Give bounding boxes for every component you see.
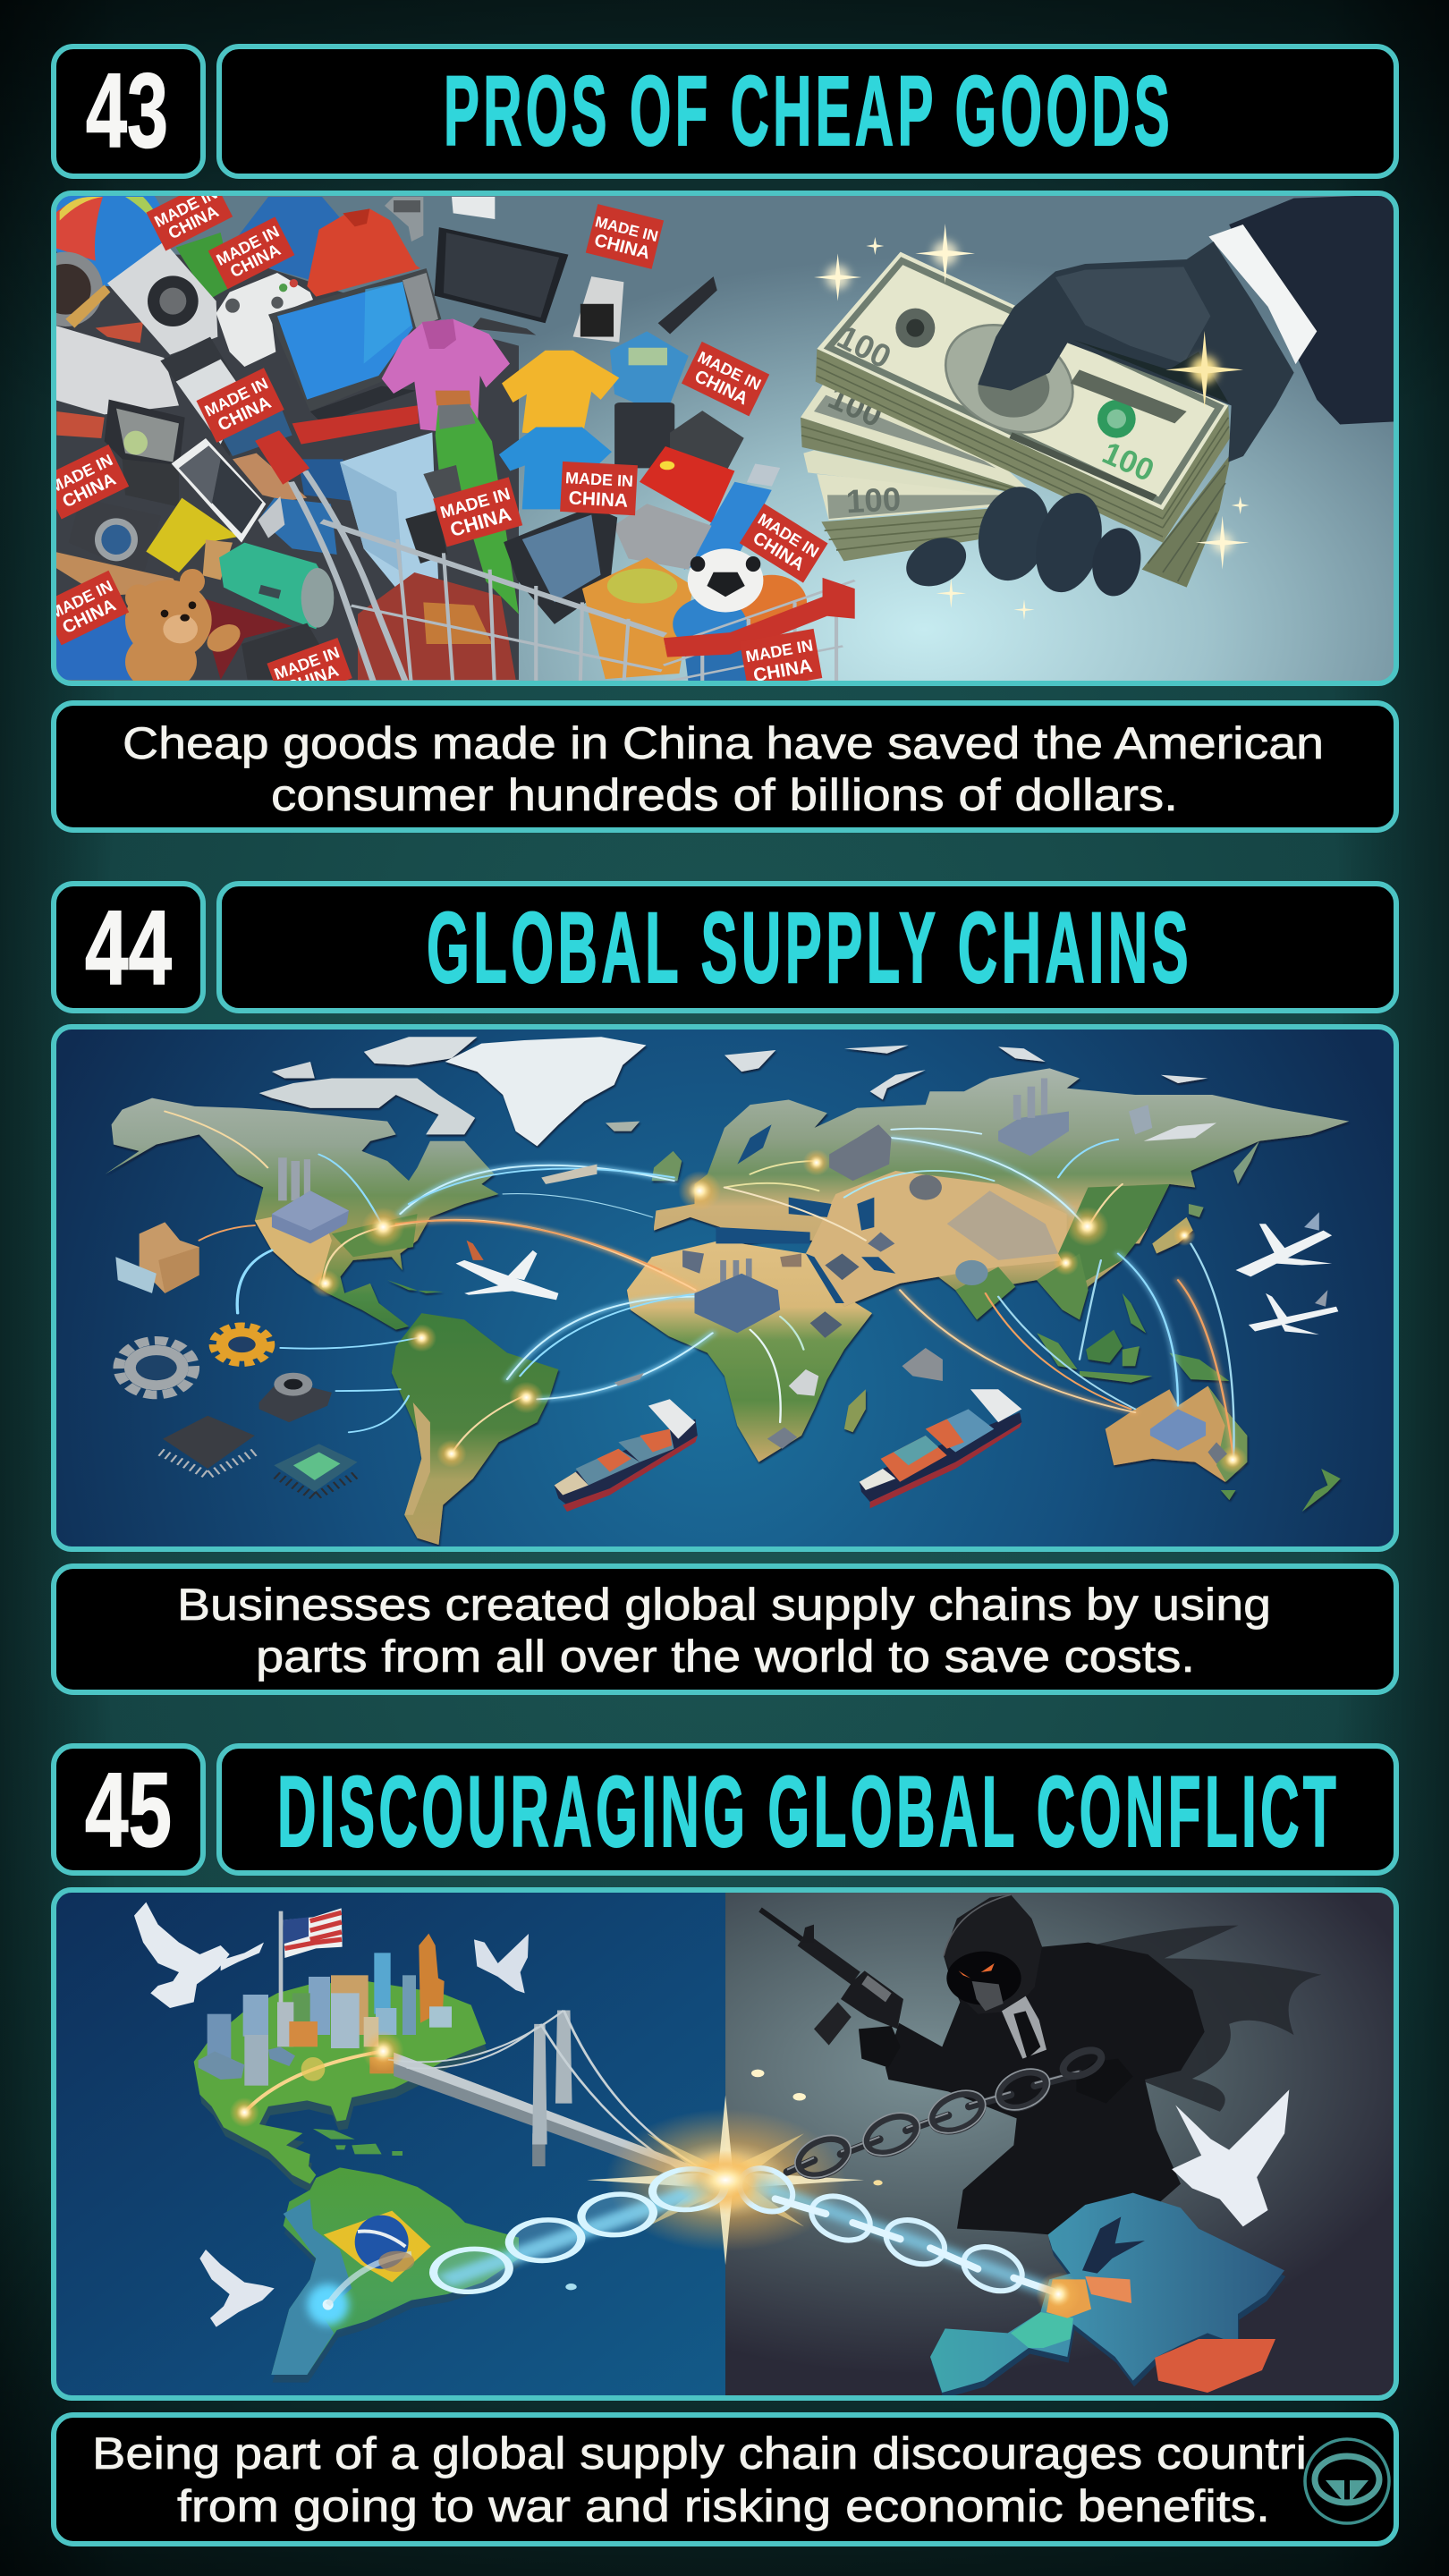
blue cylinder	[259, 498, 337, 555]
camera top	[385, 197, 423, 242]
route arcs right half	[724, 1129, 1234, 1459]
glowing chain right	[691, 2149, 1080, 2317]
small boats	[614, 1373, 644, 1385]
glowing route on north america	[230, 2030, 404, 2127]
red shirt	[307, 208, 420, 297]
rifle	[760, 1910, 802, 1939]
panel: shopping cart and cash illustration: MADE IN	[202, 374, 271, 420]
sparkles and light burst	[565, 2070, 883, 2290]
panel: shopping cart and cash illustration: CHINA	[215, 393, 275, 436]
caption: cheap goods: consumer hundreds of billions of dollars.	[271, 770, 1178, 820]
panel border	[54, 1890, 1396, 2398]
glowing chain left	[419, 2150, 776, 2301]
caption: cheap goods	[54, 703, 1396, 830]
shopping cart	[255, 430, 855, 684]
game controller	[216, 273, 313, 367]
mixed goods in basket	[358, 572, 516, 680]
panel: shopping cart and cash illustration: CHINA	[227, 241, 284, 282]
white box	[452, 197, 495, 219]
landmasses	[105, 1037, 646, 1545]
green beads	[175, 233, 227, 297]
dark devices	[423, 465, 462, 501]
middle stack	[801, 378, 1031, 495]
yellow cup	[146, 498, 239, 572]
blue jacket	[239, 197, 340, 284]
panel: shopping cart and cash illustration: CHINA	[447, 503, 513, 541]
container ship left	[555, 1399, 698, 1512]
dark figure with rifle	[760, 1894, 1205, 2234]
skyscrapers	[199, 1934, 452, 2086]
panel: shopping cart and cash illustration: MADE IN	[744, 636, 814, 665]
caption: discouraging war: Being part of a global supply chain discourages countri	[92, 2428, 1307, 2479]
panel: shopping cart and cash illustration: MADE IN	[565, 469, 634, 490]
american flag	[279, 1908, 343, 2046]
heading: global supply chains	[219, 884, 1396, 1011]
blue bag	[54, 606, 146, 680]
dove right	[1172, 2089, 1289, 2226]
chips	[161, 1373, 358, 1496]
number badge 43: 43	[86, 52, 168, 170]
red hammer	[292, 405, 419, 445]
laptop	[268, 268, 442, 324]
north america with city and flag	[194, 1908, 487, 2193]
panel: shopping cart and cash illustration: MADE IN	[47, 451, 115, 496]
number badge 44: 44	[85, 889, 172, 1007]
europe map	[930, 2193, 1285, 2399]
panel: shopping cart and cash illustration: MADE IN	[214, 223, 282, 269]
panel: shopping cart and cash illustration: MADE IN	[695, 348, 764, 394]
panel: peace versus conflict illustration	[47, 1885, 1410, 2402]
section 44: global supply chains	[49, 884, 1400, 1692]
camera	[69, 498, 161, 575]
goods, centre	[499, 276, 807, 683]
route arcs left half	[165, 1111, 713, 1453]
gloves	[859, 2026, 901, 2068]
wheel and plank	[56, 252, 103, 326]
cardboard boxes	[115, 1222, 199, 1293]
silver panel	[54, 325, 179, 414]
flowing cape	[1045, 1926, 1321, 2112]
panel: shopping cart and cash illustration: CHINA	[284, 662, 342, 698]
caption: supply chains: Businesses created global supply chains by using	[177, 1580, 1271, 1630]
gears	[119, 1326, 270, 1394]
blue box	[298, 459, 352, 501]
glowing nodes	[310, 1149, 1247, 1474]
panel: shopping cart and cash illustration: CHINA	[60, 596, 119, 638]
panel: shopping cart and cash illustration: CHINA	[568, 487, 629, 512]
panel: shopping cart and cash illustration: MADE IN	[755, 510, 822, 561]
main stack	[816, 252, 1232, 588]
panel: shopping cart and cash illustration: CHINA	[691, 367, 751, 409]
made in china tags: MADE IN	[151, 184, 220, 231]
dove bottom left	[199, 2250, 275, 2327]
caption: discouraging war: from going to war and risking economic benefits.	[177, 2481, 1270, 2531]
factories	[272, 1078, 1227, 1463]
black speaker	[123, 459, 179, 507]
teddy bear	[125, 569, 245, 691]
airplanes	[456, 1212, 1338, 1335]
blue board	[224, 411, 292, 456]
panel: shopping cart and cash illustration: MADE IN	[593, 213, 660, 245]
beach ball	[56, 196, 162, 286]
panel: shopping cart and cash illustration	[56, 196, 1394, 681]
south america with brazil flag	[271, 2167, 520, 2383]
caption: supply chains	[54, 1566, 1396, 1692]
heading: pros of cheap goods	[219, 47, 1396, 176]
main stack: 100	[1097, 436, 1159, 488]
middle stack: 100	[823, 378, 888, 435]
dove top right	[474, 1934, 529, 1993]
panel: world map of supply routes	[49, 1022, 1400, 1555]
panel: shopping cart and cash illustration: MADE IN	[47, 577, 115, 623]
green bottle	[436, 405, 519, 614]
panel: shopping cart and cash illustration: CHINA	[751, 656, 814, 686]
phone	[172, 438, 266, 543]
pile of goods, left	[56, 196, 519, 681]
panel: shopping cart and cash illustration: CHINA	[60, 470, 119, 512]
caption: supply chains: parts from all over the world to save costs.	[256, 1631, 1195, 1682]
dark device bottom	[242, 623, 340, 680]
lowest stack	[817, 474, 1002, 561]
dark chain	[787, 2045, 1106, 2186]
panel: shopping cart and cash illustration: CHINA	[750, 529, 808, 575]
dollar stacks and gloved hand	[801, 224, 1294, 620]
caption: cheap goods: Cheap goods made in China have saved the American	[123, 718, 1324, 768]
speaker	[107, 242, 217, 355]
panel: shopping cart and cash illustration: MADE IN	[438, 485, 513, 522]
made in china tags	[146, 179, 233, 250]
panel: shopping cart and cash illustration: CHINA	[592, 231, 652, 263]
icon: circular logo	[1305, 2439, 1389, 2523]
section 45: discouraging global conflict	[47, 1746, 1410, 2544]
lowest stack: 100	[845, 480, 902, 520]
panel border	[54, 193, 1396, 683]
container ship right	[860, 1389, 1021, 1508]
monitor behind goods	[435, 227, 568, 335]
sparkles	[814, 224, 1250, 620]
suspension bridge	[388, 2011, 702, 2178]
section 43: pros of cheap goods	[34, 47, 1414, 830]
dark red cloth	[197, 597, 292, 680]
suit sleeve and cuff	[1208, 194, 1395, 424]
made in china tags: CHINA	[165, 202, 222, 243]
middle sheet	[803, 450, 1004, 495]
flesh coloured item	[233, 453, 307, 501]
number badge 45: 45	[85, 1751, 172, 1869]
red cloth	[56, 411, 105, 438]
caption: discouraging war	[54, 2415, 1396, 2544]
tan plank	[54, 552, 182, 597]
dove top left	[134, 1902, 264, 2008]
pink polo	[382, 319, 510, 436]
picture frame	[105, 400, 185, 471]
tablet	[160, 336, 236, 455]
inland seas	[716, 1124, 895, 1303]
main stack: 100	[832, 318, 897, 376]
glove	[898, 242, 1294, 600]
panel: shopping cart and cash illustration: MADE IN	[272, 643, 342, 683]
panel border	[54, 1027, 1396, 1549]
teal thermos	[219, 543, 331, 629]
